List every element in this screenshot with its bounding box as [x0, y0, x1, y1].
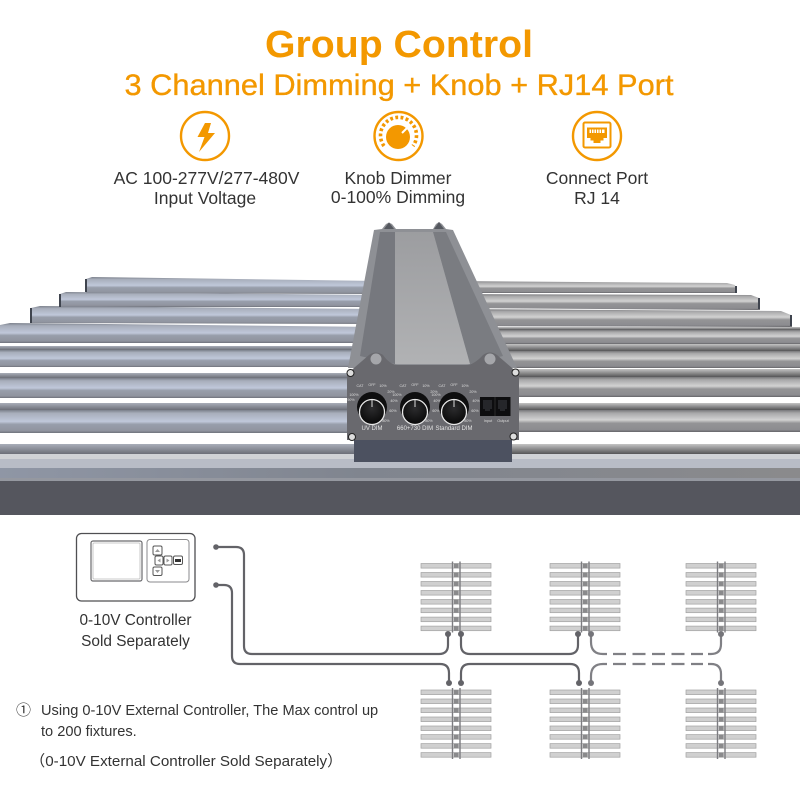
knob: UV DIM: OFF — [368, 383, 376, 387]
knob: UV DIM: 40% — [390, 399, 398, 403]
knob: Standard DIM: 40% — [472, 399, 480, 403]
knob: Standard DIM — [431, 383, 480, 432]
knob: 660+730 DIM: 80% — [425, 419, 433, 423]
controller screen — [91, 541, 142, 581]
knob: Standard DIM: 10% — [461, 384, 469, 388]
knob: 660+730 DIM: OFF — [411, 383, 419, 387]
note text: （0-10V External Controller Sold Separately） — [30, 753, 342, 770]
knob: 660+730 DIM: CAT — [400, 384, 407, 388]
knob: UV DIM: CAT — [357, 384, 364, 388]
text: input voltage: Input Voltage — [154, 188, 256, 208]
knob: 660+730 DIM: 100% — [392, 393, 402, 397]
text: connect port: RJ 14 — [574, 188, 620, 208]
driver base — [354, 438, 512, 462]
feature: connect port — [546, 112, 648, 208]
subtitle: 3 Channel Dimming + Knob + RJ14 Port — [124, 69, 674, 102]
knob: UV DIM: 100% — [349, 393, 359, 397]
RJ14 ports — [480, 397, 510, 423]
knob: 660+730 DIM — [392, 383, 441, 432]
note text: to 200 fixtures. — [41, 724, 137, 740]
icon: RJ port — [573, 112, 621, 160]
knob: Standard DIM: CAT — [439, 384, 446, 388]
knob: 660+730 DIM: 20% — [430, 390, 438, 394]
knob: Standard DIM: 100% — [431, 393, 441, 397]
knob: UV DIM: UV DIM — [362, 426, 383, 432]
note text: Using 0-10V External Controller, The Max control up — [41, 703, 378, 719]
knob: UV DIM — [347, 383, 398, 432]
knob: UV DIM: 60% — [389, 409, 397, 413]
driver front panel — [347, 352, 519, 440]
front bar and platform — [0, 454, 800, 515]
icon: lightning bolt — [181, 112, 229, 160]
knob: Standard DIM: 20% — [469, 390, 477, 394]
text: connect port: Connect Port — [546, 168, 648, 188]
wiring: controller to fixtures — [213, 544, 724, 686]
knob: Standard DIM: 80% — [464, 419, 472, 423]
title: Group Control — [265, 24, 533, 66]
knob: 660+730 DIM: 40% — [433, 399, 441, 403]
knob: Standard DIM: Standard DIM — [435, 426, 473, 432]
controller caption: Sold Separately — [81, 633, 190, 650]
knob: 660+730 DIM: 60% — [432, 409, 440, 413]
RJ14 ports: Input — [484, 419, 493, 423]
controller buttons — [147, 540, 189, 582]
knob: 660+730 DIM: 10% — [422, 384, 430, 388]
controller box — [76, 534, 195, 601]
light bars: left side — [0, 277, 380, 454]
knob: UV DIM: 90% — [347, 398, 355, 402]
fixture diagram: bottom row — [421, 688, 756, 759]
icon: dimmer knob — [374, 112, 422, 160]
fixture diagram: top row — [421, 562, 756, 632]
note text: ① — [16, 702, 31, 719]
knob: UV DIM: 20% — [387, 390, 395, 394]
controller caption: 0-10V Controller — [79, 612, 192, 629]
product photo: light bars with driver — [0, 222, 800, 515]
light bars: right side — [440, 281, 800, 454]
knob: Standard DIM: OFF — [450, 383, 458, 387]
feature: input voltage — [114, 112, 300, 208]
RJ14 ports: Output — [497, 419, 510, 423]
feature: knob dimmer — [331, 112, 465, 207]
note text — [16, 702, 378, 770]
text: knob dimmer: 0-100% Dimming — [331, 187, 465, 207]
knob: Standard DIM: 60% — [471, 409, 479, 413]
text: knob dimmer: Knob Dimmer — [345, 168, 452, 188]
text: input voltage: AC 100-277V/277-480V — [114, 168, 300, 188]
knob: UV DIM: 80% — [382, 419, 390, 423]
knob: 660+730 DIM: 660+730 DIM — [397, 426, 433, 432]
driver body — [348, 222, 517, 368]
knob: UV DIM: 10% — [379, 384, 387, 388]
